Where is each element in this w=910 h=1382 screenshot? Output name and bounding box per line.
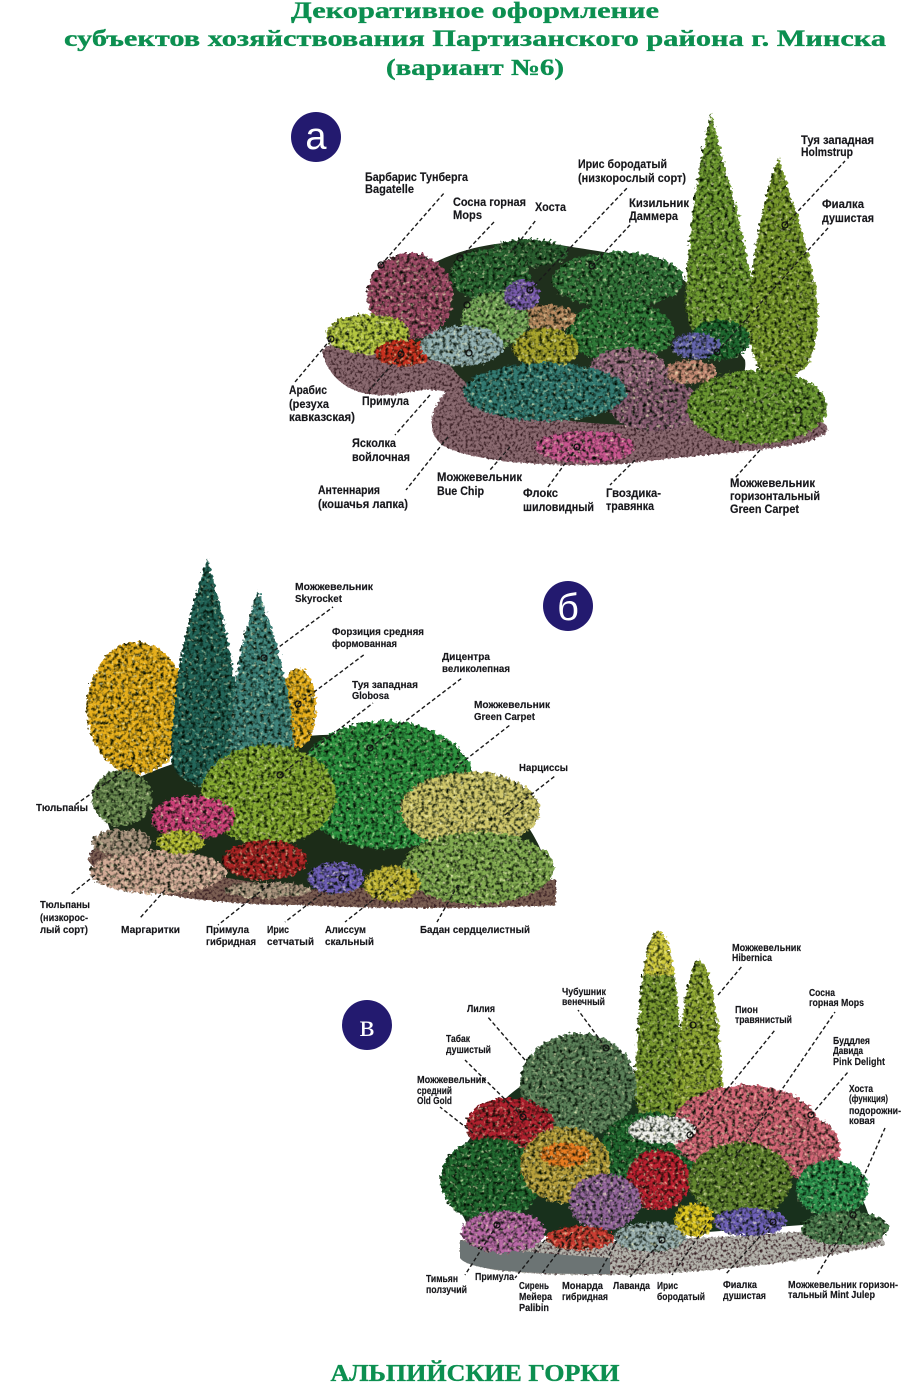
labels a: шиловидный	[523, 502, 594, 514]
labels b	[36, 582, 568, 948]
labels c: средний	[417, 1086, 452, 1097]
labels a: (кошачья лапка)	[318, 499, 408, 511]
labels b: Примула	[206, 925, 249, 936]
labels c: Можжевельник	[732, 943, 802, 954]
labels c: Pink Delight	[833, 1057, 886, 1068]
labels a: Хоста	[535, 202, 567, 214]
labels a: Сосна горная	[453, 197, 526, 209]
labels b: Дицентра	[442, 652, 490, 663]
labels a: Примула	[362, 396, 410, 408]
labels c: душистая	[723, 1291, 766, 1302]
badge a	[291, 112, 341, 162]
labels a: душистая	[822, 213, 874, 225]
labels b: Туя западная	[352, 680, 418, 691]
labels c: гибридная	[562, 1291, 608, 1303]
labels c: Пион	[735, 1005, 758, 1016]
labels c: Можжевельник горизон-	[788, 1280, 898, 1291]
badge a: a	[305, 116, 327, 158]
labels a: Арабис	[289, 385, 328, 397]
labels b: Globosa	[352, 691, 389, 702]
panel: garden variant a	[289, 112, 874, 516]
title: (вариант №6)	[386, 55, 564, 80]
labels c: Сосна	[809, 988, 835, 999]
labels a: Кизильник	[629, 198, 689, 210]
labels c: травянистый	[735, 1015, 792, 1026]
labels a: Барбарис Тунберга	[365, 172, 469, 184]
labels a: Ясколка	[352, 438, 397, 450]
labels b: лый сорт)	[40, 925, 88, 936]
labels a: кавказская)	[289, 412, 355, 424]
labels b: формованная	[332, 638, 397, 650]
illustration: rock garden a	[322, 112, 828, 465]
labels c: тальный Mint Julep	[788, 1290, 875, 1301]
badge b	[543, 581, 593, 631]
leader lines b	[70, 607, 555, 925]
labels c: Табак	[446, 1033, 471, 1045]
labels b: Тюльпаны	[40, 900, 90, 911]
labels c: Лилия	[467, 1004, 495, 1015]
labels b: Форзиция средняя	[332, 627, 424, 638]
labels c: Чубушник	[562, 986, 607, 998]
labels a: Bagatelle	[365, 184, 414, 196]
leader lines a	[295, 161, 845, 490]
labels c: Буддлея	[833, 1036, 870, 1047]
labels a: Гвоздика-	[606, 488, 661, 500]
labels c: Old Gold	[417, 1096, 452, 1107]
labels c: Давида	[833, 1046, 863, 1057]
labels a: Ирис бородатый	[578, 159, 667, 171]
labels b: Нарциссы	[519, 763, 568, 774]
badge c	[342, 1000, 392, 1050]
labels b: Маргаритки	[121, 925, 180, 936]
labels b: Можжевельник	[295, 582, 374, 593]
labels a: Можжевельник	[730, 478, 815, 490]
illustration: rock garden b	[87, 558, 556, 908]
labels b: Бадан сердцелистный	[420, 925, 530, 936]
labels c: бородатый	[657, 1291, 705, 1303]
labels c: Фиалка	[723, 1280, 757, 1291]
labels b: великолепная	[442, 664, 510, 675]
labels c: горная Mops	[809, 998, 864, 1009]
labels a: Туя западная	[801, 135, 874, 147]
labels a: Green Carpet	[730, 504, 799, 516]
labels a: Holmstrup	[801, 147, 853, 159]
labels a: (низкорослый сорт)	[578, 173, 686, 185]
title	[64, 0, 887, 80]
labels a	[289, 135, 874, 516]
labels c: Hibernica	[732, 953, 772, 964]
labels b: гибридная	[206, 936, 256, 948]
labels b: Skyrocket	[295, 594, 343, 605]
labels c: душистый	[446, 1045, 491, 1056]
labels b: Ирис	[267, 925, 289, 936]
labels b: Тюльпаны	[36, 803, 88, 814]
labels c: ползучий	[426, 1285, 467, 1296]
labels a: травянка	[606, 501, 655, 513]
labels a: Mops	[453, 210, 482, 222]
panel: garden variant c	[342, 930, 901, 1314]
labels a: Даммера	[629, 211, 679, 223]
labels c: (функция)	[849, 1093, 888, 1105]
labels c: венечный	[562, 997, 605, 1008]
labels a: Можжевельник	[437, 472, 522, 484]
labels c: ковая	[849, 1116, 875, 1127]
labels b: (низкорос-	[40, 913, 88, 924]
labels a: горизонтальный	[730, 491, 820, 503]
labels c: Ирис	[657, 1281, 678, 1292]
labels c: Тимьян	[426, 1274, 458, 1285]
labels b: Можжевельник	[474, 700, 551, 711]
labels b: скальный	[325, 937, 374, 948]
labels c	[417, 943, 901, 1314]
badge c: в	[359, 1007, 375, 1043]
illustration: rock garden c	[440, 930, 889, 1275]
labels b: Алиссум	[325, 925, 366, 936]
labels c: Сирень	[519, 1281, 549, 1292]
labels a: (резуха	[289, 399, 330, 411]
labels c: подорожни-	[849, 1106, 901, 1117]
labels b: сетчатый	[267, 937, 314, 948]
title: субъектов хозяйствования Партизанского района г. Минска	[64, 26, 887, 51]
labels c: Palibin	[519, 1303, 549, 1314]
panel: garden variant b	[36, 558, 593, 948]
labels a: войлочная	[352, 452, 410, 464]
labels c: Монарда	[562, 1281, 603, 1292]
labels a: Флокс	[523, 488, 559, 500]
labels a: Фиалка	[822, 199, 865, 211]
labels c: Примула	[475, 1272, 514, 1283]
labels a: Антеннария	[318, 485, 380, 497]
labels c: Хоста	[849, 1084, 873, 1095]
leader lines c	[440, 965, 885, 1278]
badge b: б	[557, 587, 579, 629]
labels c: Лаванда	[613, 1281, 650, 1292]
labels a: Bue Chip	[437, 486, 484, 498]
labels c: Мейера	[519, 1292, 552, 1303]
labels c: Можжевельник	[417, 1075, 487, 1086]
labels b: Green Carpet	[474, 712, 536, 723]
